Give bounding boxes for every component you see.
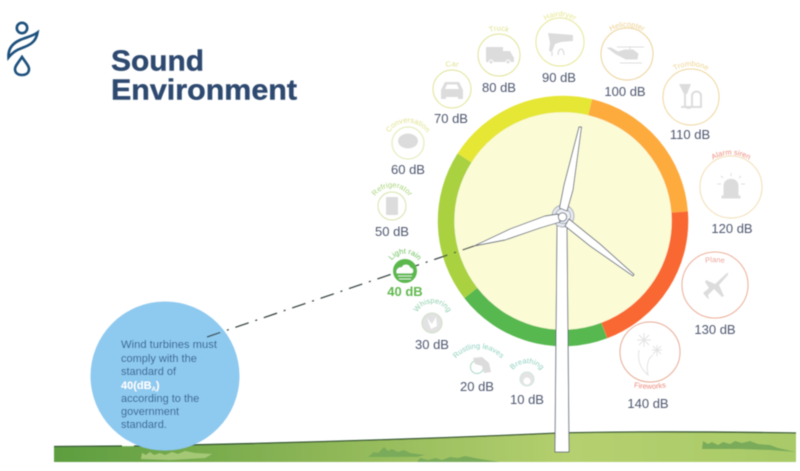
decibel dial <box>446 104 680 338</box>
item: trombone 110 dB <box>662 60 720 142</box>
item: truck 80 dB: Truck <box>488 26 510 32</box>
item: fireworks 140 dB: Fireworks <box>634 382 666 390</box>
leader line <box>207 246 474 337</box>
item: car 70 dB: Car <box>445 60 460 68</box>
speech bubble: 40 dBA standard: ) <box>156 380 160 392</box>
item: breathing 10 dB: Breathing <box>509 358 544 371</box>
item: rustling leaves 20 dB: 20 dB <box>460 379 494 394</box>
item: conversation 60 dB: Conversation <box>386 118 430 133</box>
item: car 70 dB <box>432 60 472 126</box>
item: plane 130 dB: Plane <box>704 256 725 264</box>
item: light rain 40 dB: Light rain <box>388 248 422 260</box>
speech bubble: 40 dBA standard: Wind turbines must <box>121 339 217 351</box>
item: helicopter 100 dB: Helicopter <box>608 21 646 32</box>
item: rustling leaves 20 dB: Rustling leaves <box>452 342 504 358</box>
item: truck 80 dB: 80 dB <box>482 80 516 95</box>
speech bubble: 40 dBA standard: standard. <box>121 419 167 431</box>
item: helicopter 100 dB <box>600 21 654 99</box>
item: trombone 110 dB: Trombone <box>672 60 709 70</box>
item: helicopter 100 dB: 100 dB <box>604 84 646 99</box>
item: fireworks 140 dB <box>618 320 682 411</box>
item: truck 80 dB <box>476 26 522 95</box>
blades <box>560 127 582 211</box>
speech bubble: 40 dBA standard: standard of <box>121 366 177 378</box>
item: rustling leaves 20 dB <box>452 342 504 394</box>
speech bubble: 40 dBA standard: 40(dB <box>121 380 152 392</box>
title: Sound <box>111 46 204 78</box>
item: refrigerator 50 dB <box>371 182 412 239</box>
item: hairdryer 90 dB: Hairdryer <box>543 10 577 20</box>
bushes <box>141 451 212 460</box>
item: breathing 10 dB <box>509 358 544 407</box>
item: fireworks 140 dB: 140 dB <box>627 396 669 411</box>
item: car 70 dB: 70 dB <box>434 111 468 126</box>
item: alarm siren 120 dB <box>699 150 763 236</box>
title <box>111 46 297 106</box>
item: refrigerator 50 dB: Refrigerator <box>371 182 412 196</box>
item: hairdryer 90 dB <box>534 10 586 85</box>
item: plane 130 dB <box>680 250 750 337</box>
item: refrigerator 50 dB: 50 dB <box>375 224 409 239</box>
item: light rain 40 dB: 40 dB <box>387 284 423 299</box>
wind turbine <box>474 127 634 452</box>
item: trombone 110 dB: 110 dB <box>670 127 710 142</box>
speech bubble: 40 dBA standard: government <box>121 406 179 418</box>
item: hairdryer 90 dB: 90 dB <box>542 70 576 85</box>
item: alarm siren 120 dB: 120 dB <box>711 221 753 236</box>
speech bubble: 40 dBA standard: comply with the <box>121 353 197 365</box>
item: whispering 30 dB: Whispering <box>412 298 452 313</box>
item: alarm siren 120 dB: Alarm siren <box>712 150 751 160</box>
tower <box>555 225 569 452</box>
item: conversation 60 dB: 60 dB <box>391 162 425 177</box>
title: Environment <box>111 74 297 106</box>
item: plane 130 dB: 130 dB <box>694 322 736 337</box>
speech bubble: 40 dBA standard: A <box>152 387 157 393</box>
item: light rain 40 dB <box>386 248 423 299</box>
logo <box>8 23 37 75</box>
nacelle <box>552 205 574 227</box>
item: breathing 10 dB: 10 dB <box>510 392 544 407</box>
item: whispering 30 dB: 30 dB <box>415 337 449 352</box>
ground <box>54 432 796 462</box>
item: whispering 30 dB <box>412 298 452 352</box>
speech bubble: 40 dBA standard: according to the <box>121 393 199 405</box>
speech bubble: 40 dBA standard <box>90 302 240 450</box>
item: conversation 60 dB <box>386 118 430 177</box>
